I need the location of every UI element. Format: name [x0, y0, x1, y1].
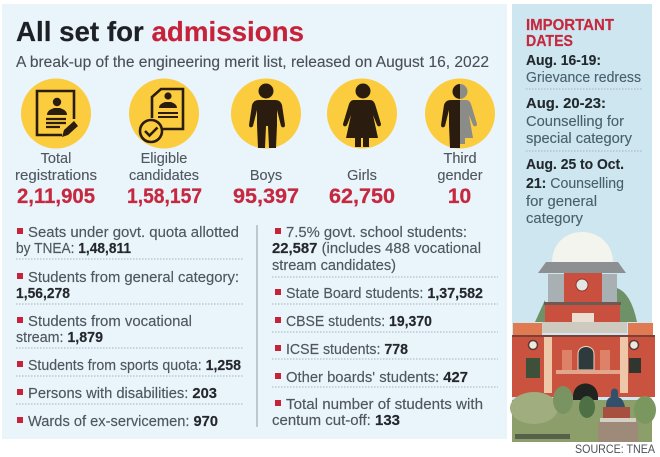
- number: 1,58,157: [127, 185, 202, 208]
- fact: vocational stream: [16, 314, 192, 346]
- panel: important dates: [512, 4, 652, 442]
- icon: half man half woman silhouette: [425, 78, 495, 148]
- label: Girls: [347, 168, 377, 184]
- date: general category counselling: 21: Counselling: [526, 175, 624, 192]
- label: gender: [437, 168, 483, 184]
- fact: govt school students: [272, 225, 481, 274]
- date: special category counselling: [526, 95, 632, 147]
- heading: important dates: [526, 17, 614, 50]
- label: candidates: [129, 168, 199, 184]
- date: grievance redress: Aug. 16-19:: [526, 52, 601, 69]
- fact: seats under govt quota: by TNEA: 1,48,811: [16, 241, 131, 257]
- date: special category counselling: Aug. 20-23:: [526, 95, 606, 112]
- fact: persons with disabilities: Persons with disabilities: 203: [28, 386, 217, 402]
- stat: girls: [327, 78, 397, 208]
- fact: CBSE: CBSE students: 19,370: [286, 314, 432, 330]
- stat: total registrations: [15, 78, 97, 208]
- illustration: university building: [510, 232, 656, 442]
- date: general category counselling: [526, 156, 624, 227]
- title: All set for admissions: [16, 16, 304, 47]
- fact: sports quota: Students from sports quota: 1,258: [28, 358, 241, 374]
- date: general category counselling: category: [526, 210, 583, 227]
- icon: registration form: [21, 78, 91, 148]
- fact: general category: [16, 270, 239, 302]
- fact: vocational stream: stream: 1,879: [16, 330, 103, 346]
- date: general category counselling: Aug. 25 to Oct.: [526, 156, 624, 173]
- number: 10: [448, 185, 471, 208]
- label: Eligible: [141, 151, 187, 167]
- subtitle: A break-up of the engineering merit list, released on August 16, 2022: [16, 54, 489, 71]
- fact: general category: 1,56,278: [16, 286, 70, 302]
- stat: boys: [231, 78, 301, 208]
- fact: centum cut-off: [272, 397, 483, 429]
- list: right column facts: [272, 225, 498, 429]
- label: Boys: [250, 168, 282, 184]
- fact: wards of ex-servicemen: Wards of ex-servicemen: 970: [28, 414, 218, 430]
- number: 62,750: [329, 185, 395, 208]
- panel: main background: [2, 4, 507, 439]
- fact: ICSE: ICSE students: 778: [286, 342, 408, 358]
- heading: important dates: DATES: [526, 33, 573, 50]
- icon: man silhouette: [231, 78, 301, 148]
- fact: seats under govt quota: Seats under govt. quota allotted: [28, 225, 239, 241]
- date: special category counselling: special category: [526, 130, 632, 147]
- fact: govt school students: 7.5% govt. school students:: [286, 225, 467, 241]
- date: general category counselling: for general: [526, 193, 597, 210]
- date: grievance redress: Grievance redress: [526, 69, 641, 86]
- number: 95,397: [233, 185, 299, 208]
- heading: important dates: IMPORTANT: [526, 17, 614, 34]
- fact: centum cut-off: Total number of students with: [286, 397, 483, 413]
- fact: other boards: Other boards' students: 427: [286, 370, 468, 386]
- fact: govt school students: stream candidates): [272, 258, 396, 274]
- source credit: SOURCE: TNEA: [575, 444, 655, 456]
- stat: third gender: [425, 78, 495, 208]
- number: 2,11,905: [17, 185, 95, 208]
- date: special category counselling: Counselling for: [526, 113, 624, 130]
- fact: centum cut-off: centum cut-off: 133: [272, 413, 400, 429]
- fact: seats under govt quota: [16, 225, 239, 257]
- icon: candidate document with check mark: [129, 78, 199, 148]
- label: registrations: [15, 168, 97, 184]
- fact: vocational stream: Students from vocational: [28, 314, 192, 330]
- date: grievance redress: [526, 52, 641, 86]
- label: Total: [41, 151, 71, 167]
- stat: eligible candidates: [127, 78, 202, 208]
- list: left column facts: [16, 225, 243, 430]
- fact: general category: Students from general category:: [28, 270, 239, 286]
- fact: govt school students: 22,587 (includes 488 vocational: [272, 241, 481, 257]
- fact: state board: State Board students: 1,37,582: [286, 286, 483, 302]
- label: Third: [443, 151, 477, 167]
- icon: woman silhouette: [327, 78, 397, 148]
